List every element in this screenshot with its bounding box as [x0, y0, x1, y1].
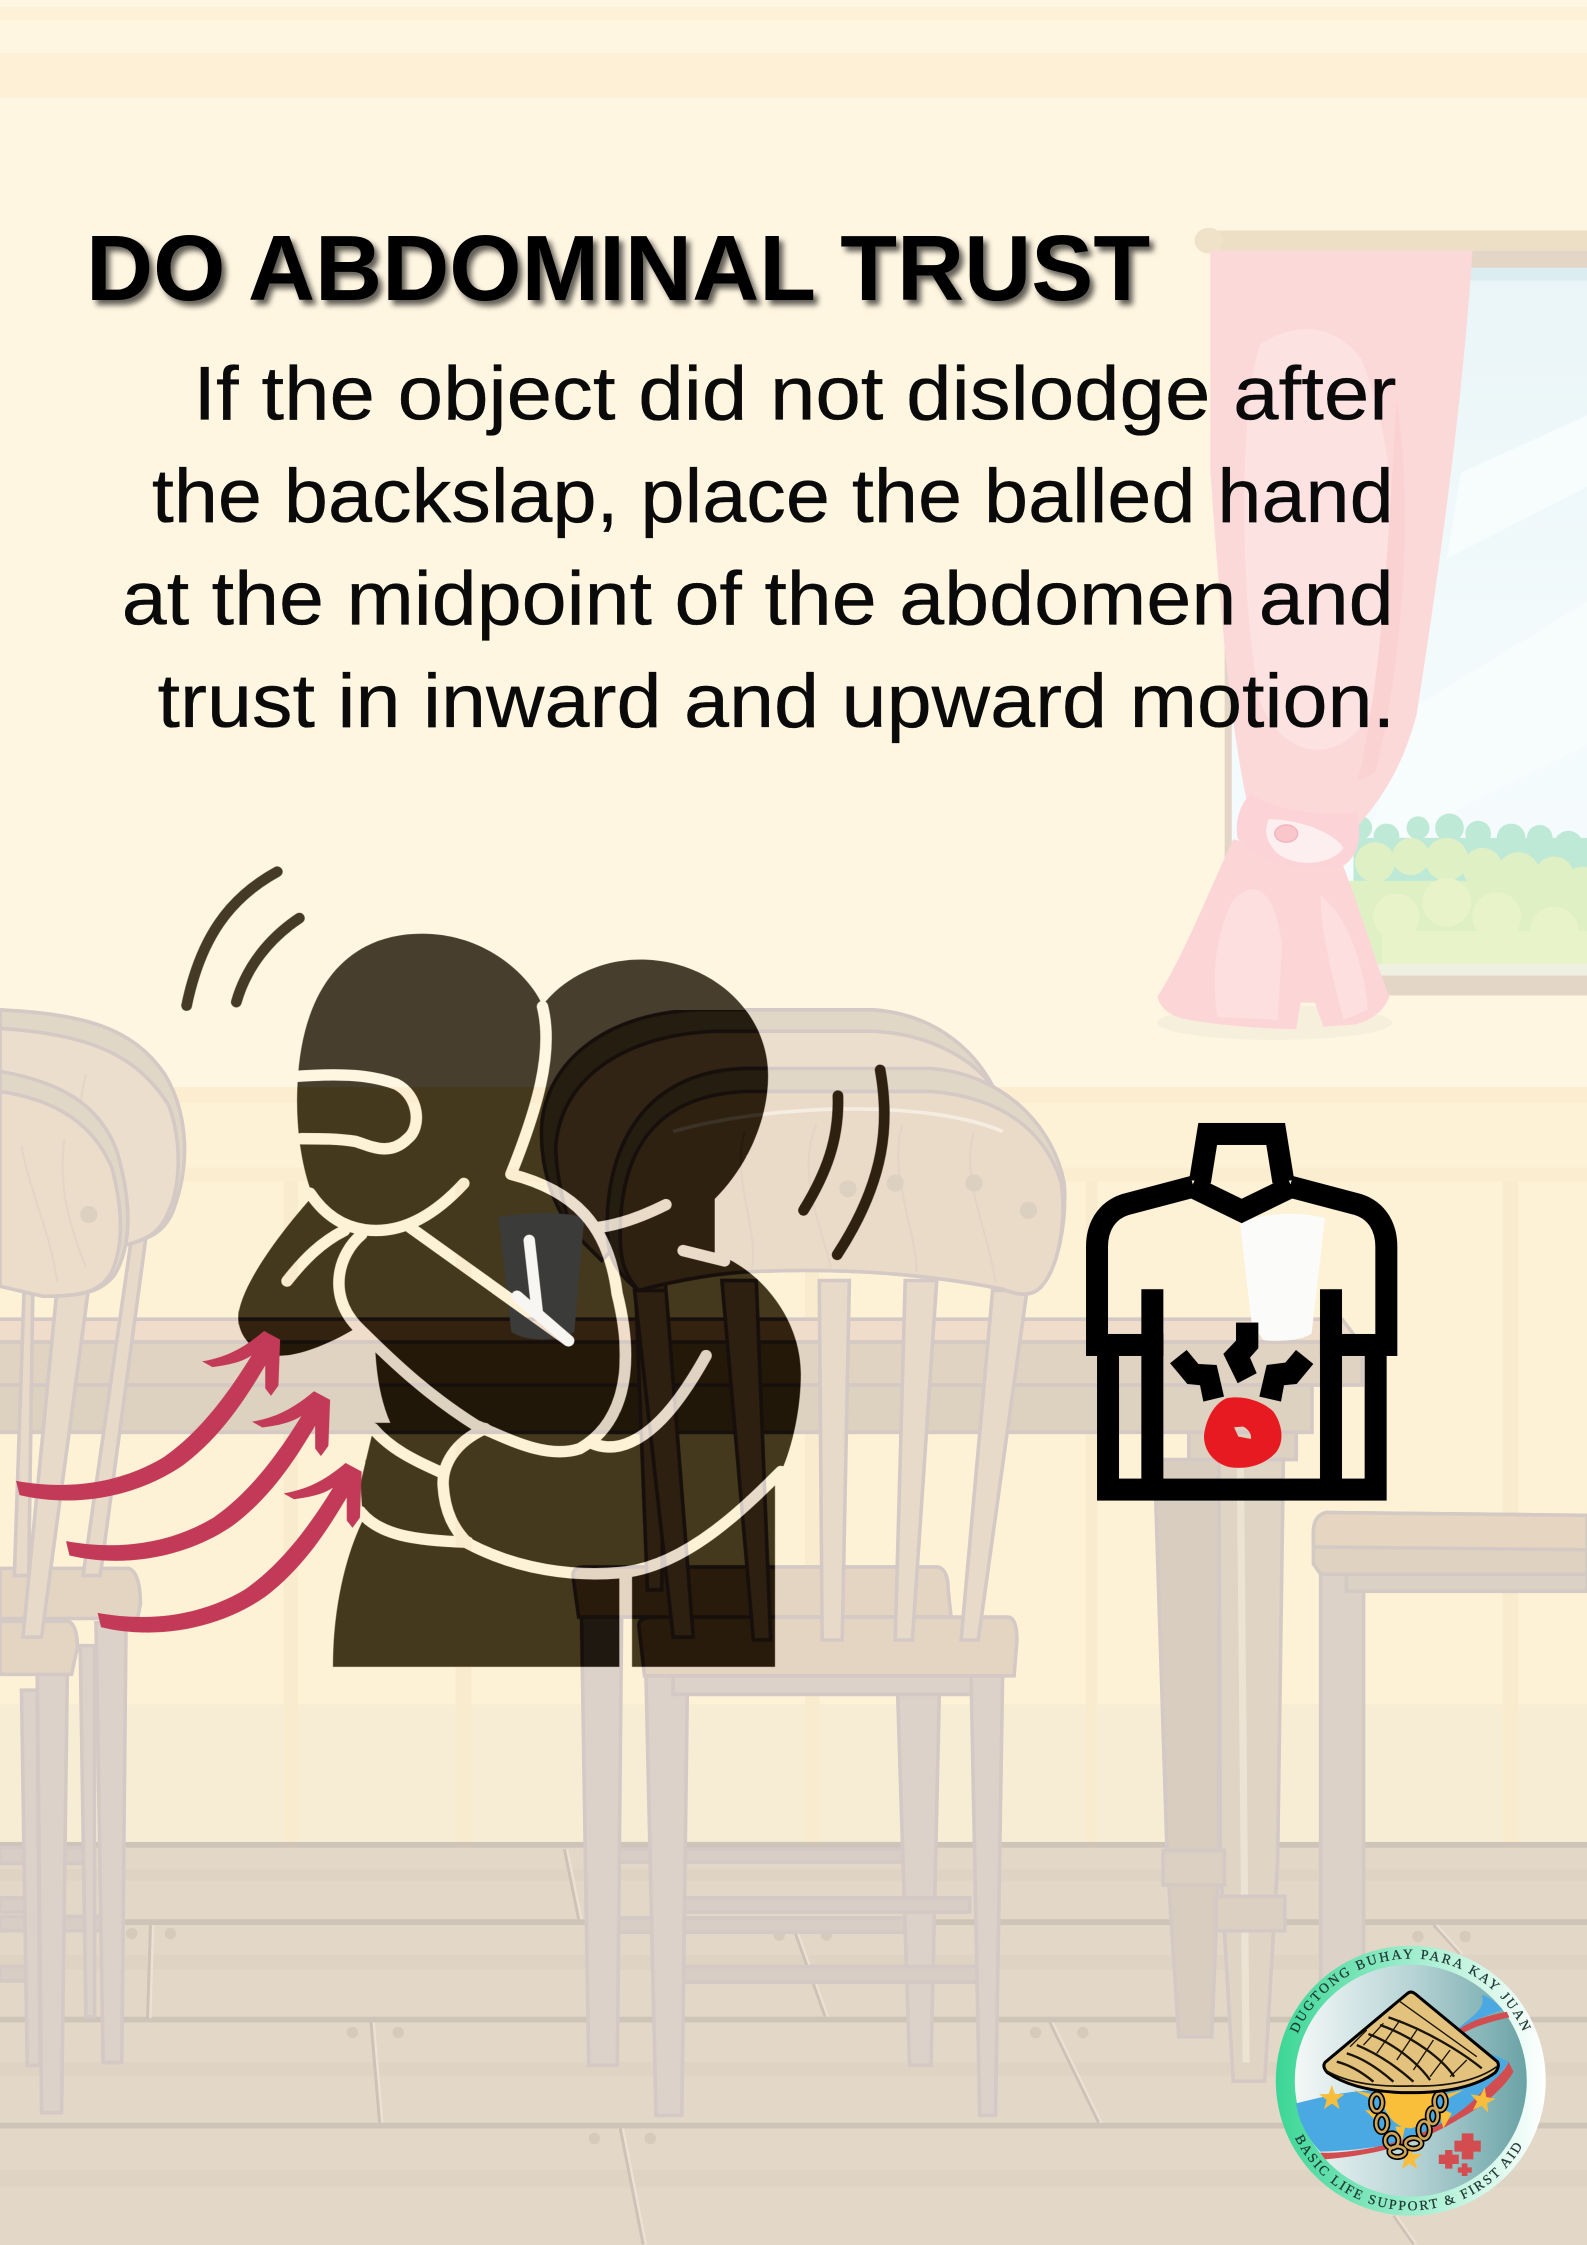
- motion lines: right: [804, 1070, 884, 1255]
- crosses: [1439, 2133, 1481, 2176]
- curtain rod: [1195, 228, 1587, 254]
- conical hat: [1324, 1992, 1498, 2093]
- arrow 1: [16, 1331, 280, 1501]
- chain: [1371, 2093, 1446, 2157]
- icon: torso with stuck object and glass: [1097, 1134, 1386, 1490]
- logo text: BASIC LIFE SUPPORT & FIRST AID: [1294, 2134, 1521, 2210]
- front bushes: [1332, 838, 1587, 964]
- motion lines: left: [187, 872, 299, 1005]
- body text: the backslap, place the balled hand: [152, 454, 1394, 539]
- icon: red obstruction: [1204, 1397, 1281, 1468]
- arrows: thrust direction: [16, 1331, 362, 1633]
- chair group: left chairs: [0, 1010, 185, 2113]
- body text: If the object did not dislodge after: [193, 352, 1397, 437]
- window with view of bushes: [1225, 251, 1587, 995]
- curtain: [1157, 251, 1472, 1040]
- icon: white glass: [1240, 1214, 1325, 1341]
- silhouette of two people (rescuer and choking person): [238, 934, 802, 1668]
- body text: trust in inward and upward motion.: [158, 659, 1395, 744]
- chair group: center front chair: [607, 1069, 1065, 2116]
- stars: [1319, 2085, 1497, 2169]
- title: DO ABDOMINAL TRUST: [86, 216, 1150, 320]
- white lines over dark glass: [517, 1240, 569, 1341]
- arrow 3: [98, 1463, 362, 1633]
- body text: at the midpoint of the abdomen and: [122, 556, 1394, 641]
- logo text: [1290, 1949, 1532, 2210]
- sun: [1353, 2087, 1463, 2143]
- background: stool at right: [1313, 1513, 1587, 2032]
- arrow 2: [66, 1391, 330, 1561]
- logo badge: [1276, 1946, 1546, 2216]
- back bushes: [1349, 814, 1587, 910]
- icon: dark glass: [498, 1213, 584, 1340]
- chair group: center back chair: [541, 1010, 993, 2065]
- table legs: [1154, 1431, 1296, 2081]
- icon: pain marks: [1170, 1323, 1313, 1402]
- furniture: table and chairs: [0, 1010, 1362, 2116]
- body text: [122, 352, 1397, 744]
- table: [0, 1319, 1362, 1432]
- logo text: DUGTONG BUHAY PARA KAY JUAN: [1290, 1949, 1532, 2034]
- background: floor: [0, 1842, 1587, 2245]
- river: [1296, 1995, 1508, 2152]
